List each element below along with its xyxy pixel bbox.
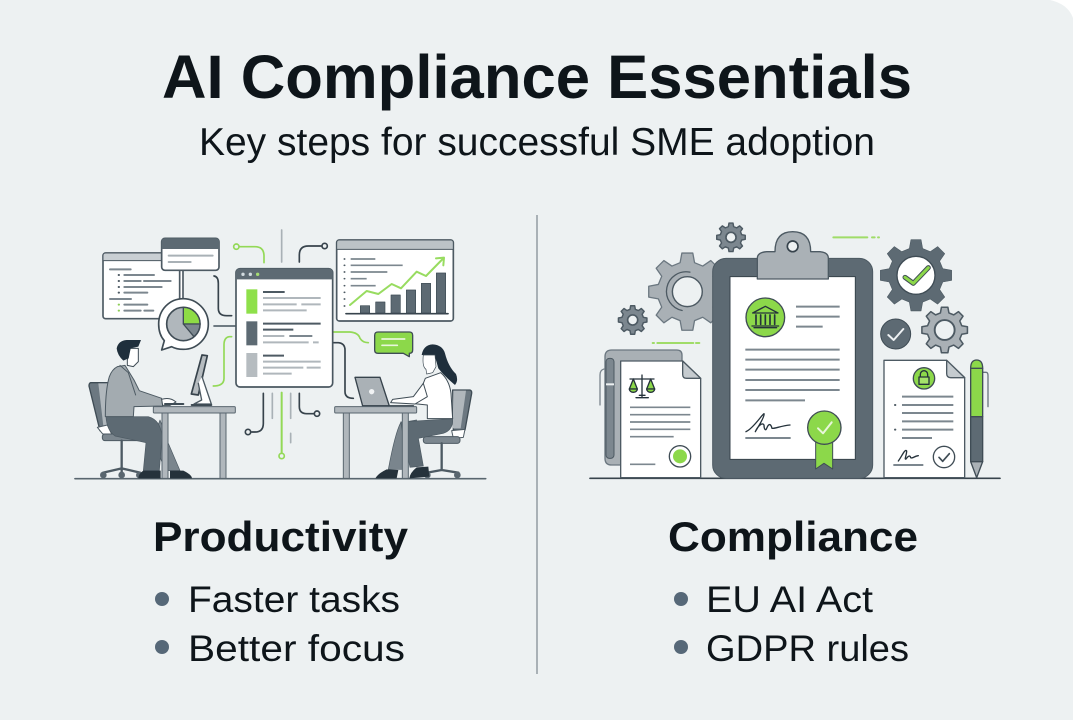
head and hair	[127, 348, 138, 367]
left list window	[103, 253, 183, 319]
face	[423, 355, 436, 374]
icon: institution badge	[746, 298, 785, 337]
pen	[971, 360, 988, 478]
feet	[375, 467, 429, 478]
bullet: better focus: Better focus	[188, 627, 405, 669]
left desk	[153, 407, 235, 478]
green accent dashes	[653, 237, 879, 343]
panel: compliance	[668, 513, 918, 669]
text lines	[745, 307, 840, 438]
arm and hands	[391, 383, 427, 404]
clip	[757, 232, 828, 279]
illustration: productivity	[75, 230, 486, 479]
growth chart window	[337, 240, 453, 321]
keyboard	[165, 401, 211, 408]
chair	[453, 390, 472, 430]
small gear top	[717, 223, 745, 252]
connector nodes	[234, 243, 327, 459]
signature	[898, 450, 918, 461]
bullet: faster tasks: Faster tasks	[188, 578, 400, 620]
clipboard	[713, 232, 873, 478]
hand	[162, 398, 176, 405]
icon: lock	[913, 368, 935, 389]
woman at desk	[355, 344, 472, 478]
torso	[412, 373, 453, 419]
title: AI Compliance Essentials	[162, 43, 912, 111]
right desk	[335, 407, 417, 478]
hair	[422, 344, 457, 385]
central dashboard window	[236, 269, 333, 387]
illustration: compliance	[590, 223, 1000, 478]
connector lines	[213, 230, 368, 453]
laptop	[355, 377, 389, 406]
man at desk	[89, 340, 211, 478]
small gear left	[618, 306, 647, 334]
corner highlight	[1050, 0, 1073, 18]
folder with pen	[600, 350, 682, 465]
seal	[669, 446, 691, 467]
pie chart bubble	[159, 299, 208, 350]
signature	[746, 414, 790, 432]
green chat bubble	[375, 332, 413, 357]
shoes	[138, 471, 192, 478]
grey gear right	[922, 307, 967, 353]
legs	[388, 420, 417, 469]
right document	[884, 360, 965, 478]
small header window	[162, 238, 219, 300]
monitor	[191, 355, 207, 395]
heading: compliance: Compliance	[668, 513, 918, 560]
subtitle: Key steps for successful SME adoption	[199, 121, 875, 164]
legs	[153, 420, 180, 471]
bullet: gdpr rules: GDPR rules	[706, 627, 909, 669]
center divider	[536, 215, 538, 674]
ground line	[590, 476, 1000, 481]
round check badge	[881, 319, 911, 349]
left document	[621, 361, 701, 478]
heading: productivity: Productivity	[153, 513, 408, 560]
ground line	[75, 476, 486, 481]
panel: productivity	[153, 513, 408, 669]
bullet: eu ai act: EU AI Act	[706, 578, 874, 620]
ribbon seal	[816, 438, 833, 469]
chair	[89, 383, 108, 431]
torso	[105, 365, 163, 417]
large grey gear	[649, 253, 726, 330]
dark gear with check	[880, 240, 952, 311]
icon: scales	[629, 375, 655, 398]
